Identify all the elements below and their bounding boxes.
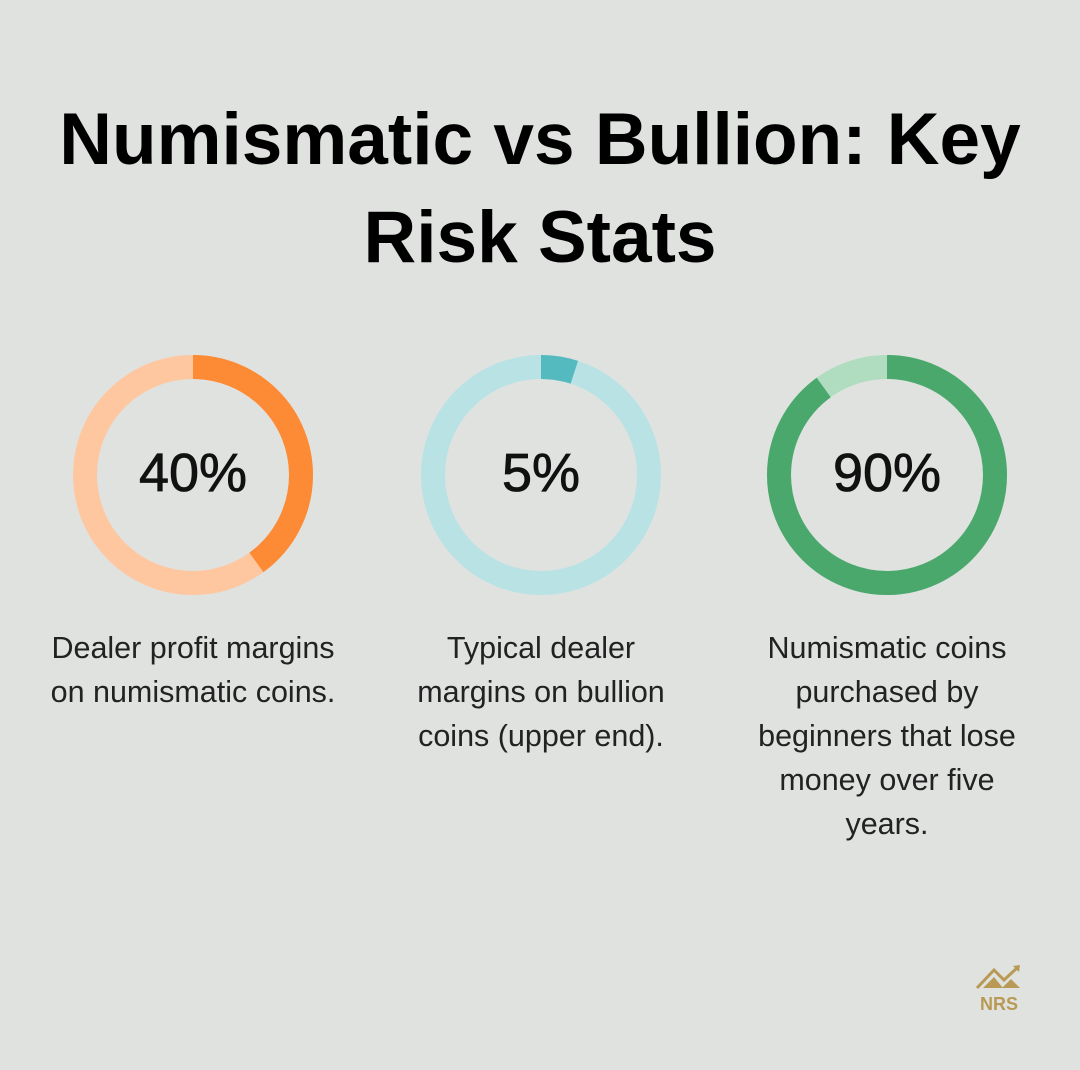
description: beginners lose money: purchased by	[795, 675, 979, 709]
description: beginners lose money: years.	[845, 807, 929, 841]
description: dealer profit: Dealer profit margins	[51, 631, 335, 665]
description: bullion margins	[417, 631, 665, 753]
description: beginners lose money	[758, 631, 1016, 841]
description: beginners lose money: Numismatic coins	[768, 631, 1006, 665]
title: Numismatic vs Bullion: Key	[59, 99, 1021, 180]
title	[59, 99, 1021, 278]
panel: 90% stat	[758, 355, 1016, 841]
description: beginners lose money: money over five	[779, 763, 995, 797]
number: 90%: 90%	[833, 443, 941, 503]
panel: 5% stat	[417, 355, 665, 753]
description: beginners lose money: beginners that lose	[758, 719, 1016, 753]
logo: NRS	[976, 965, 1020, 1014]
donut: 90%	[767, 355, 1007, 595]
panel: 40% stat	[51, 355, 335, 709]
logo: NRS: NRS	[980, 994, 1018, 1014]
donut: 5%	[421, 355, 661, 595]
description: bullion margins: Typical dealer	[447, 631, 635, 665]
description: dealer profit	[51, 631, 335, 709]
description: bullion margins: coins (upper end).	[418, 719, 664, 753]
description: dealer profit: on numismatic coins.	[51, 675, 335, 709]
number: 5%: 5%	[502, 443, 580, 503]
description: bullion margins: margins on bullion	[417, 675, 665, 709]
number: 40%: 40%	[139, 443, 247, 503]
title: Risk Stats	[364, 197, 716, 278]
donut: 40%	[73, 355, 313, 595]
